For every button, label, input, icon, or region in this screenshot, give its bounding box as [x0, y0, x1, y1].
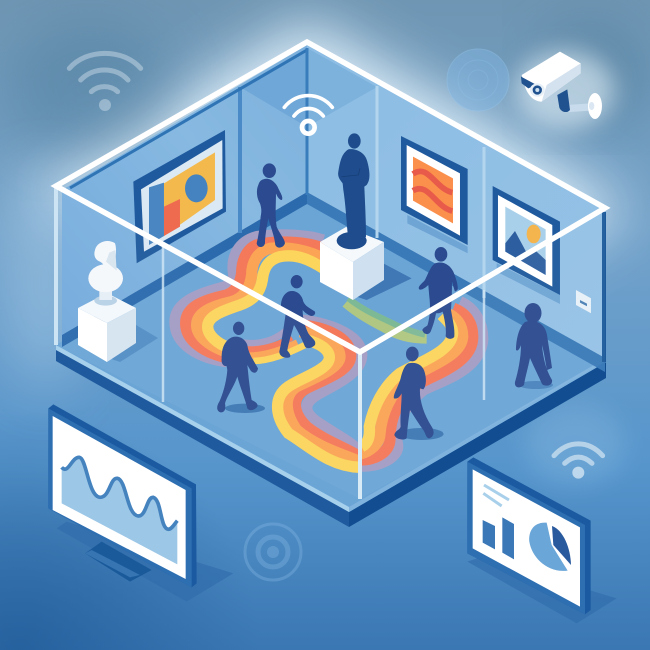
- artwork: abstract painting: [133, 130, 226, 263]
- artwork: mountain picture: [493, 186, 560, 304]
- icon: wifi bottom right: [554, 444, 603, 479]
- figure: visitor upper right: [419, 247, 458, 339]
- figure: visitor lower left: [217, 322, 258, 412]
- heat segment: between walkers: [240, 330, 305, 361]
- sculpture: white bust on pedestal: [78, 241, 158, 362]
- heat segment: faint green trail: [347, 298, 427, 337]
- sculpture: dark blue statue: [337, 133, 369, 249]
- panel: front glass walls and white frame: [56, 42, 605, 499]
- icon: wall light switch: [576, 290, 591, 313]
- figure: visitor far right: [515, 303, 553, 389]
- chart: heat-map visitor path: [175, 235, 483, 467]
- heat segment: right branch: [360, 302, 483, 466]
- figure: visitor center: [279, 275, 315, 358]
- monitor: bar and pie dashboard: [467, 457, 617, 623]
- panel: room platform: [56, 200, 606, 527]
- icon: faint signal circle top: [447, 49, 509, 111]
- panel: left wall: [62, 45, 307, 347]
- heat segment: pedestal to left loop: [175, 235, 323, 362]
- icon: wifi top left: [69, 53, 141, 111]
- icon: security camera: [521, 52, 602, 119]
- shadows: walker floor shadows: [225, 263, 444, 440]
- figure: visitor front right: [394, 347, 434, 439]
- monitor: line chart display: [48, 404, 233, 602]
- figure: visitor by left wall: [257, 163, 285, 248]
- artwork: orange wave painting: [401, 136, 468, 253]
- sculpture: central pedestal: [320, 227, 384, 300]
- heat segment: central S curve: [278, 320, 362, 467]
- icon: wifi on wall: [284, 96, 332, 134]
- panel: right wall: [307, 45, 605, 372]
- icon: faint signal rings bottom: [245, 524, 301, 580]
